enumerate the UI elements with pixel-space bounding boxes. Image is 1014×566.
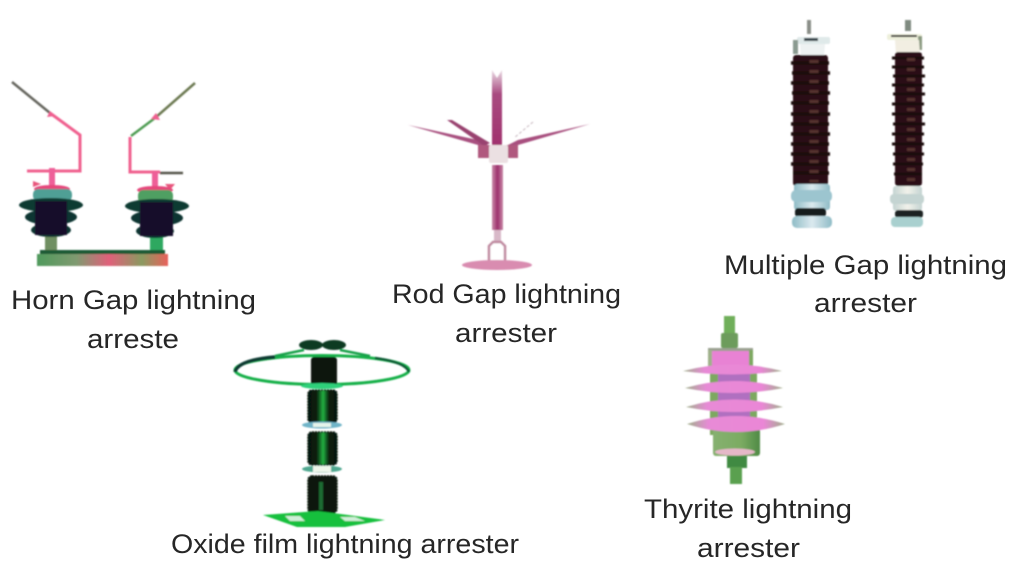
icon: rod gap arrester [408,70,590,270]
label: multiple gap: Multiple Gap lightning [724,250,1007,280]
label: thyrite [644,494,852,563]
label: rod gap: Rod Gap lightning [392,279,621,309]
panel: rod gap lightning arrester [392,70,621,348]
label: multiple gap [724,250,1007,318]
icon: oxide film arrester [235,340,409,527]
left unit [791,20,832,228]
label: thyrite: arrester [697,533,800,563]
panel: multiple gap lightning arrester [724,20,1007,318]
icon: multiple gap arresters [791,20,925,228]
icon: horn gap arrester [12,82,195,266]
left insulator [45,232,57,252]
label: multiple gap: arrester [814,288,917,318]
label: thyrite: Thyrite lightning [644,494,852,524]
label: horn gap: arreste [87,324,179,354]
panel: oxide film lightning arrester [171,340,519,559]
base [40,250,165,255]
icon: thyrite arrester [683,316,785,484]
label: horn gap [11,285,256,354]
label: rod gap [392,279,621,348]
panel: thyrite lightning arrester [644,316,852,563]
right insulator [150,232,163,252]
label: horn gap: Horn Gap lightning [11,285,256,315]
panel: horn gap lightning arrester [11,82,256,354]
label: oxide film: Oxide film lightning arrester [171,529,519,559]
label: rod gap: arrester [455,318,557,348]
right unit [887,20,925,227]
